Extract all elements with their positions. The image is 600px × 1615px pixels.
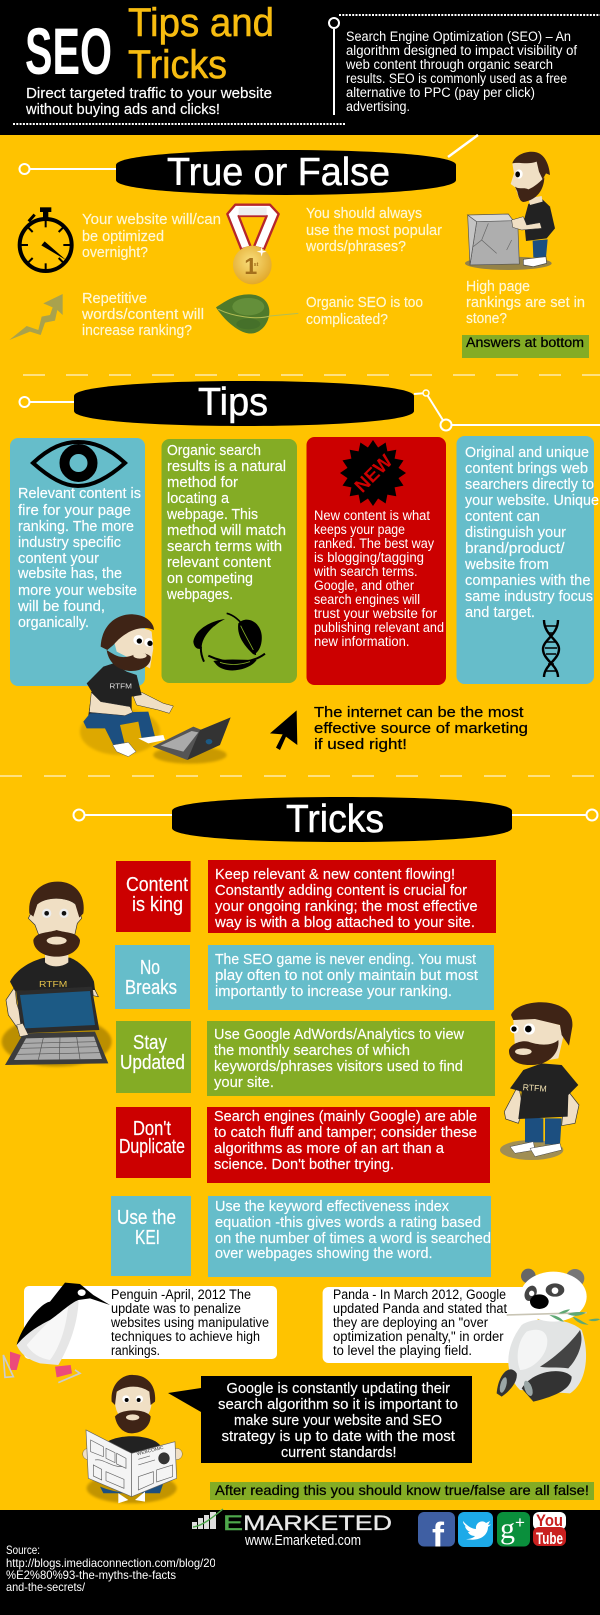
text: question 3: Repetitive <box>82 291 147 307</box>
callout: google speech bubble: search algorithm so it is important to <box>218 1397 458 1413</box>
heading: Tricks <box>172 797 512 842</box>
text: question 4: complicated? <box>306 312 388 328</box>
card: original content: and target. <box>465 605 535 621</box>
callout: penguin update: rankings. <box>111 1343 160 1358</box>
illustration: man standing: RTFM <box>522 1082 547 1094</box>
card: new content: trust your website for <box>314 606 437 621</box>
heading: Tricks: Tricks <box>286 798 384 841</box>
card: original content: content brings web <box>465 461 588 477</box>
text: question 2: use the most popular <box>306 223 442 239</box>
card: new content: Google, and other <box>314 578 414 593</box>
trick: use the KEI: Use the keyword effectiveness index <box>215 1199 450 1215</box>
text: question 2 <box>305 206 442 255</box>
card: new content: with search terms. <box>313 564 418 579</box>
trick: content is king: your ongoing ranking; the most effective <box>215 899 478 915</box>
trick: no breaks: Breaks <box>125 977 177 999</box>
card: relevant content: industry specific <box>18 535 122 551</box>
card: original content: searchers directly to <box>465 477 594 493</box>
panel: footer <box>0 1509 600 1615</box>
panel: header <box>0 0 600 135</box>
icon: youtube: You <box>536 1511 563 1530</box>
card: organic search: on competing <box>167 571 253 587</box>
card: new content: new information. <box>314 634 410 649</box>
callout: google speech bubble: make sure your website and SEO <box>234 1413 442 1429</box>
text: question 3 <box>81 291 204 339</box>
callout: answers at bottom <box>462 335 589 358</box>
text: question 3: increase ranking? <box>82 323 192 339</box>
text: SEO definition: Search Engine Optimization (SEO) – An <box>346 29 571 44</box>
trick: no breaks <box>115 945 494 1010</box>
text: question 1: be optimized <box>82 229 164 245</box>
text: internet callout: The internet can be the most <box>314 705 524 721</box>
trick: content is king <box>116 860 496 933</box>
text: question 1 <box>82 212 221 261</box>
trick: content is king: Constantly adding content is crucial for <box>215 883 467 899</box>
text: question 5: stone? <box>466 311 507 327</box>
card: organic search: method for <box>167 475 238 491</box>
card: original content: same industry focus <box>465 589 593 605</box>
callout: penguin update: techniques to achieve high <box>111 1329 260 1344</box>
trick: use the KEI: Use the <box>117 1207 176 1229</box>
illustration: man holding laptop: RTFM <box>39 980 67 989</box>
callout: panda update <box>323 1269 600 1402</box>
text: question 4 <box>306 295 423 328</box>
callout: penguin update: update was to penalize <box>111 1301 241 1316</box>
heading: Tips: Tips <box>198 381 268 424</box>
icon: DNA helix <box>543 620 559 677</box>
icon: medal <box>227 205 279 284</box>
card: organic search: results is a natural <box>167 459 286 475</box>
icon: rising arrow <box>9 294 63 340</box>
card: relevant content: more your website <box>18 583 137 599</box>
callout: google speech bubble: Google is constantly updating their <box>226 1381 450 1397</box>
callout: google speech bubble <box>168 1376 472 1463</box>
card: original content: brand/product/ <box>465 541 565 557</box>
card: original content: distinguish your <box>465 525 566 541</box>
trick: stay updated <box>116 1021 495 1096</box>
trick: content is king: way is with a blog attached to your site. <box>214 915 475 931</box>
card: organic search: method will match <box>167 523 286 539</box>
card: organic search: webpage. This <box>166 507 258 523</box>
text: question 1: Your website will/can <box>82 212 221 228</box>
callout: panda update: optimization penalty," in order <box>333 1329 504 1344</box>
card: new content: keeps your page <box>314 522 405 537</box>
text: question 5: High page <box>466 279 530 295</box>
card: relevant content: content your <box>18 551 99 567</box>
trick: content is king: is king <box>132 894 183 916</box>
logo: Emarketed: MARKETED <box>243 1512 392 1535</box>
callout: panda update: to level the playing field. <box>333 1343 472 1358</box>
text: SEO definition <box>345 29 577 114</box>
icon: leaf cycle <box>193 613 265 670</box>
text: question 2: You should always <box>306 206 422 222</box>
panel: true or false <box>9 135 589 358</box>
illustration: man with stone block <box>465 152 555 270</box>
text: question 5: rankings are set in <box>466 295 585 311</box>
card: original content <box>456 436 599 684</box>
card: new content: New content is what <box>314 508 430 523</box>
icon: new starburst <box>340 440 406 506</box>
icon: facebook: f <box>432 1515 445 1556</box>
logo: Emarketed: E <box>223 1512 243 1535</box>
panel: tips <box>10 381 600 764</box>
card: new content <box>306 437 446 685</box>
icon: google plus: g <box>500 1512 515 1545</box>
trick: use the KEI: over webpages showing the word. <box>215 1246 432 1262</box>
callout: penguin update: websites using manipulative <box>110 1315 269 1330</box>
trick: stay updated: the monthly searches of which <box>214 1043 410 1059</box>
illustration: panda <box>497 1269 600 1402</box>
card: relevant content: website has, the <box>17 566 122 582</box>
trick: use the KEI <box>111 1196 491 1277</box>
icon: twitter <box>458 1512 493 1547</box>
trick: stay updated: Updated <box>120 1052 185 1074</box>
heading: True or False: True or False <box>167 151 390 194</box>
card: original content: companies with the <box>465 573 590 589</box>
icon: stopwatch <box>20 207 72 271</box>
subtitle: Direct targeted traffic to your website <box>26 86 272 102</box>
text: internet callout: if used right! <box>314 737 407 753</box>
text: SEO definition: algorithm designed to impact visibility of <box>346 43 577 58</box>
icon: leaf <box>216 294 298 334</box>
card: relevant content <box>10 438 145 686</box>
card: relevant content: will be found, <box>17 599 105 615</box>
text: source: http://blogs.imediaconnection.com/blog/201 <box>6 1556 222 1570</box>
text: question 1: overnight? <box>82 245 148 261</box>
trick: content is king: Keep relevant & new content flowing! <box>215 867 455 883</box>
card: relevant content: organically. <box>18 615 89 631</box>
trick: don't duplicate: Don't <box>133 1118 171 1140</box>
card: organic search: locating a <box>167 491 230 507</box>
callout: google speech bubble: strategy is up to date with the most <box>222 1429 455 1445</box>
panel: tricks <box>2 797 597 1277</box>
card: organic search: search terms with <box>167 539 282 555</box>
trick: no breaks: The SEO game is never ending. You must <box>215 952 476 968</box>
trick: no breaks: play often to not only maintain but most <box>215 968 478 984</box>
card: organic search <box>162 439 297 683</box>
trick: don't duplicate <box>116 1107 490 1183</box>
logo: Emarketed: www.Emarketed.com <box>244 1532 361 1549</box>
icon: eye <box>33 442 125 486</box>
trick: no breaks: No <box>140 957 160 979</box>
subtitle: without buying ads and clicks! <box>25 102 220 118</box>
illustration: penguin <box>3 1283 110 1383</box>
subtitle <box>25 86 272 118</box>
heading: True or False <box>116 150 456 195</box>
card: new content: ranked. The best way <box>314 536 434 551</box>
trick: don't duplicate: science. Don't bother trying. <box>214 1157 394 1173</box>
title: SEO Tips and Tricks: Tricks <box>128 43 227 87</box>
card: organic search: Organic search <box>167 443 261 459</box>
icon: youtube: Tube <box>536 1529 563 1548</box>
trick: stay updated: your site. <box>214 1075 274 1091</box>
text: SEO definition: advertising. <box>346 99 410 114</box>
illustration: man sitting with laptop <box>80 614 231 764</box>
card: original content: your website. Unique <box>465 493 599 509</box>
trick: use the KEI: equation -this gives words a rating based <box>215 1215 481 1231</box>
illustration: man standing <box>500 1002 579 1160</box>
text: internet callout: effective source of marketing <box>314 721 528 737</box>
card: new content: publishing relevant and <box>314 620 444 635</box>
text: source: and-the-secrets/ <box>6 1580 86 1594</box>
trick: don't duplicate: Search engines (mainly Google) are able <box>214 1109 477 1125</box>
card: relevant content: ranking. The more <box>18 519 134 535</box>
illustration: man reading newspaper <box>83 1375 182 1503</box>
illustration: man sitting with laptop: RTFM <box>109 681 132 690</box>
logo: Emarketed <box>192 1509 392 1549</box>
callout: answer bar: After reading this you should know true/false are all false! <box>215 1482 589 1498</box>
card: original content: content can <box>465 509 540 525</box>
icon: google plus <box>497 1512 530 1546</box>
text: question 3: words/content will <box>81 307 204 323</box>
title: SEO Tips and Tricks <box>25 1 274 88</box>
trick: don't duplicate: algorithms as more of an art than a <box>214 1141 445 1157</box>
icon: facebook <box>418 1512 455 1546</box>
text: SEO definition: web content through organic search <box>345 57 553 72</box>
trick: use the KEI: on the number of times a word is searched <box>215 1231 491 1247</box>
trick: don't duplicate: to catch fluff and tamper; consider these <box>214 1125 477 1141</box>
icon: new starburst: NEW <box>351 451 397 497</box>
text: SEO definition: results. SEO is commonly used as a free <box>346 71 567 86</box>
text: source: Source: <box>6 1543 40 1557</box>
card: organic search: webpages. <box>166 587 233 603</box>
callout: panda update: Panda - In March 2012, Google <box>333 1287 506 1302</box>
card: relevant content: fire for your page <box>18 503 131 519</box>
trick: content is king: Content <box>126 874 188 896</box>
trick: stay updated: Use Google AdWords/Analytics to view <box>214 1027 464 1043</box>
callout: penguin update: Penguin -April, 2012 The <box>111 1287 251 1302</box>
icon: medal: st <box>254 262 259 268</box>
trick: stay updated: Stay <box>133 1032 167 1054</box>
callout: penguin update <box>3 1283 277 1383</box>
callout: google speech bubble: current standards! <box>281 1445 396 1461</box>
text: source: %E2%80%93-the-myths-the-facts <box>6 1568 176 1582</box>
callout: panda update: updated Panda and stated that <box>333 1301 507 1316</box>
illustration: man reading newspaper: WEBCOMIC <box>136 1445 165 1456</box>
card: organic search: relevant content <box>167 555 271 571</box>
title: SEO Tips and Tricks: Tips and <box>128 1 274 45</box>
text: question 2: words/phrases? <box>305 239 406 255</box>
heading: Tips <box>74 381 414 426</box>
title: SEO Tips and Tricks: SEO <box>25 14 112 88</box>
card: new content: is blogging/tagging <box>314 550 424 565</box>
text: SEO definition: alternative to PPC (pay per click) <box>346 85 535 100</box>
card: original content: Original and unique <box>465 445 589 461</box>
callout: panda update: they are deploying an "over <box>333 1315 488 1330</box>
icon: google plus: + <box>515 1513 525 1532</box>
text: source <box>6 1546 215 1591</box>
trick: no breaks: importantly to increase your ranking. <box>215 984 452 1000</box>
card: relevant content: Relevant content is <box>18 486 141 502</box>
card: original content: website from <box>464 557 549 573</box>
trick: don't duplicate: Duplicate <box>119 1136 185 1158</box>
icon: cursor arrow <box>270 710 297 750</box>
illustration: man holding laptop <box>2 882 112 1067</box>
icon: medal: 1 <box>244 253 257 279</box>
text: question 5 <box>466 279 585 327</box>
text: internet callout <box>314 705 528 753</box>
trick: stay updated: keywords/phrases visitors used to find <box>214 1059 463 1075</box>
icon: youtube <box>533 1511 566 1548</box>
card: new content: search engines will <box>314 592 420 607</box>
text: question 4: Organic SEO is too <box>306 295 423 311</box>
callout: answers at bottom: Answers at bottom <box>466 335 584 350</box>
trick: use the KEI: KEI <box>135 1227 160 1249</box>
